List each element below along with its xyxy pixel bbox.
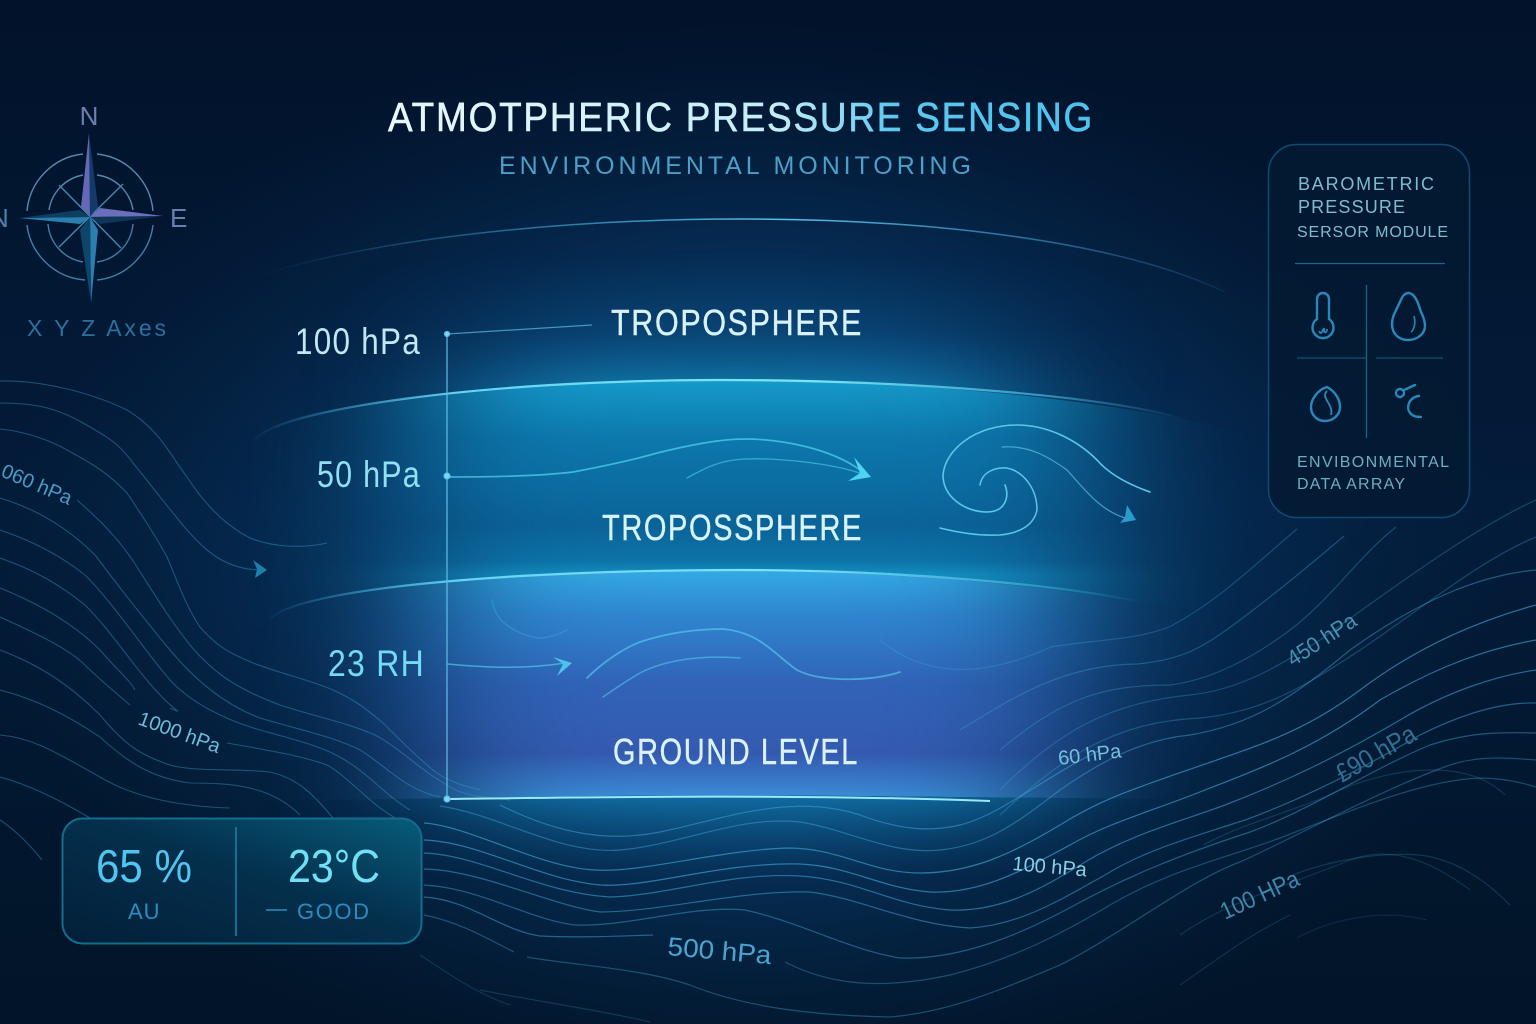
- air quality: GOOD: [297, 899, 369, 924]
- axes label: X Y Z Axes: [27, 315, 166, 341]
- contour pressure labels: 060 hPa: [0, 460, 76, 510]
- wind arrow: upper: [450, 439, 871, 481]
- module dividers: [1295, 264, 1445, 438]
- contour pressure labels: 100 hPa: [1012, 853, 1089, 882]
- module heading: [1297, 174, 1448, 241]
- humidity reading: 65 %: [96, 840, 192, 892]
- contour lines: left: [0, 381, 510, 860]
- wind arrow: lower: [448, 600, 900, 697]
- scale label: 50 hPa: 50 hPa: [317, 454, 421, 495]
- air quality: [266, 899, 369, 924]
- module footer: DATA ARRAY: [1297, 476, 1405, 493]
- contour lines: bottom centre and right: [420, 500, 1536, 1022]
- contour pressure labels: 450 hPa: [1282, 607, 1362, 671]
- module heading: PRESSURE: [1298, 197, 1405, 217]
- scale label: 23 RH: 23 RH: [328, 643, 425, 684]
- module footer: [1297, 454, 1449, 493]
- title: ATMOTPHERIC PRESSURE SENSING: [388, 94, 1094, 140]
- layer label: troposphere upper: TROPOSPHERE: [611, 302, 863, 343]
- subtitle: ENVIRONMENTAL MONITORING: [499, 152, 971, 180]
- module footer: ENVIBONMENTAL: [1297, 454, 1449, 471]
- humidity unit: AU: [128, 899, 161, 924]
- contour pressure labels: [0, 460, 1422, 970]
- wind swirl: [940, 425, 1150, 535]
- contour pressure labels: 100 HPa: [1216, 865, 1304, 925]
- contour pressure labels: 60 hPa: [1057, 740, 1123, 770]
- wind arrow: left: [253, 560, 267, 578]
- panel: barometric pressure sensor module: [1268, 144, 1470, 518]
- icon: thermometer: [1312, 293, 1334, 338]
- atmosphere layers: [322, 290, 1178, 862]
- temperature reading: 23°C: [288, 840, 380, 892]
- compass: [0, 101, 187, 341]
- contour pressure labels: £90 hPa: [1330, 718, 1422, 788]
- icon: humidity drop: [1311, 387, 1340, 421]
- scale label: 100 hPa: 100 hPa: [295, 321, 421, 362]
- compass: E: [170, 203, 187, 233]
- pressure scale axis: [444, 325, 592, 802]
- pressure boundary arcs: [255, 219, 1225, 801]
- icon: degree celsius: [1396, 385, 1421, 417]
- icon: water drop: [1392, 293, 1425, 340]
- compass: N: [80, 101, 98, 131]
- panel: readings: [62, 818, 422, 944]
- layer label: troposphere lower: TROPOSSPHERE: [602, 507, 863, 548]
- layer label: ground level: GROUND LEVEL: [613, 731, 859, 772]
- contour pressure labels: 1000 hPa: [135, 708, 224, 758]
- contour pressure labels: 500 hPa: [666, 931, 773, 970]
- module heading: BAROMETRIC: [1298, 174, 1434, 194]
- module heading: SERSOR MODULE: [1297, 224, 1448, 241]
